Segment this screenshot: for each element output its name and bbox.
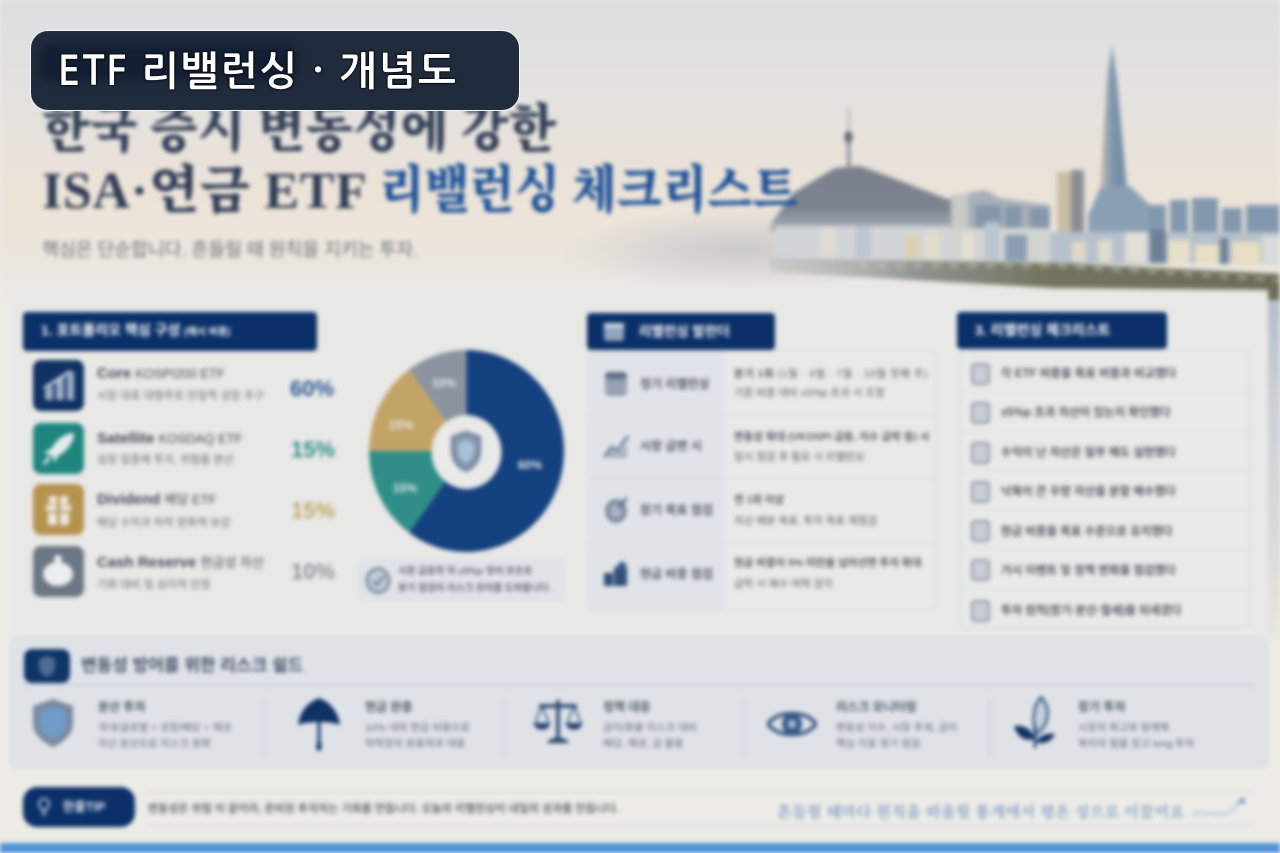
row: satellite [30,420,338,478]
check item 4: 낙폭이 큰 우량 자산을 분할 매수했다 [1001,486,1176,498]
check item 6 [961,549,1249,589]
main white panel [10,293,1268,638]
item: cash buffer: 현금 완충 [365,700,412,714]
check item 3: 수익이 난 자산은 일부 매도 실현했다 [1001,447,1176,459]
check item 7: 투자 원칙(장기·분산·절세)을 되새겼다 [1001,605,1181,617]
dark text underlay [40,44,298,80]
row: market surge: 시장 급변 시 [640,439,702,453]
item: monitoring [764,698,958,750]
icon: building chart [600,558,630,590]
check item 3 [961,432,1249,471]
row: satellite: 성장 업종에 투자, 위험을 분산 [97,454,234,466]
check item 4 [961,471,1249,510]
panel: risk shield [10,637,1268,769]
pie chart: allocation: 15% [389,418,413,432]
item: balance [531,697,698,750]
check item 1: 각 ETF 비중을 목표 비중과 비교했다 [1001,368,1176,380]
icon: trend line [601,434,631,460]
check item 1 [961,354,1249,393]
handwritten note: 흔들릴 때마다 원칙을 떠올릴 통계에서 평온 성으로 이끌어요 [777,805,1185,821]
row: goal check [589,478,937,542]
title: 리밸런싱 체크리스트 [379,163,798,220]
check item 6: 거시 이벤트 및 정책 변화를 점검했다 [1001,565,1176,577]
row: cash check: 현금 비중이 5% 미만을 넘어선면 투자 확대 [734,557,921,569]
item: diversification [30,696,232,750]
icon: calendar [600,320,628,344]
panel: checklist [960,350,1250,628]
row: dividend: Dividend 배당 ETF [97,491,217,508]
heading: section 3 checklist: 3. 리밸런싱 체크리스트 [975,322,1110,338]
panel: portfolio core composition [20,308,338,600]
icon: target [602,495,630,526]
heading: rebalancing timing [587,313,775,350]
heading: section 1: 1. 포트폴리오 핵심 구성 (예시 비중) [41,322,230,338]
item: balance: 배당, 채권, 금 활용 [603,739,684,750]
pie chart: allocation: 60% [518,458,542,472]
icon: piggy bank [33,546,84,597]
icon: lightbulb [35,794,53,818]
row: goal check: 장기 목표 점검 [640,503,713,517]
row: market surge [589,413,937,479]
mountain [770,166,950,232]
bottom accent bar [0,843,1280,853]
title: ISA·연금 ETF [42,163,368,220]
check item 2: ±5%p 초과 자산이 있는지 확인했다 [1001,407,1171,419]
tip text: 변동성은 위험 이 끝이라, 준비된 투자자는 기회를 만듭니다. 오늘의 리밸런싱이 내일의 성과를 만듭니다. [148,803,619,815]
check item 5: 현금 비중을 목표 수준으로 유지했다 [1001,526,1172,538]
item: balance: 금리/환율 리스크 대비 [603,723,697,734]
heading: section 1 [23,312,317,351]
icon: scales [531,697,585,746]
lotte tower [1100,45,1128,235]
row: cash check: 현금 비중 점검 [640,567,713,581]
row: satellite: Satellite KOSDAQ ETF [97,430,242,447]
icon: scribble flourish [1192,796,1248,818]
row: core: 시장 대표 대형주로 안정적 성장 추구 [97,390,264,402]
row: core: Core KOSPI200 ETF [97,365,225,382]
callout: pie note [358,559,566,602]
tip row [20,784,1248,830]
subtitle: 핵심은 단순합니다. 흔들릴 때 원칙을 지키는 투자. [42,239,418,260]
heading: section 3 checklist [957,312,1167,349]
row: regular rebalancing: 기준 비중 대비 ±5%p 초과 시 조정 [734,387,885,399]
item: cash buffer: 하락장의 완충력과 대응 [365,739,465,750]
item: monitoring: 핵심 지표 정기 점검 [836,739,920,750]
badge text: ETF 리밸런싱 · 개념도 [58,50,457,90]
row: cash reserve [30,543,337,600]
row: goal check: 자산 배분 목표, 투자 목표 재점검 [734,515,877,527]
row: cash reserve: 10% [291,559,335,584]
icon: umbrella [295,695,343,754]
icon: check badge [363,564,393,596]
title [40,98,799,220]
title: 한국 증시 변동성에 강한 [42,102,556,159]
item: long-term [1012,694,1196,751]
check item 5 [961,510,1249,549]
row: goal check: 연 1회 이상 [734,494,784,506]
row: dividend: 15% [291,498,335,523]
heading: risk shield [20,646,304,686]
item: long-term: 시장의 회고와 함께해 [1078,723,1169,734]
item: monitoring: 변동성 지수, 시장 추세, 금리 [836,723,957,734]
row: cash check: 급락 시 매수 여력 검각 [734,578,833,590]
pie chart: allocation: 15% [393,481,417,495]
pie chart: allocation: 10% [432,376,456,390]
row: core [30,356,336,414]
icon: calendar [602,369,630,398]
item: monitoring: 리스크 모니터링 [836,700,917,714]
row: satellite: 15% [291,437,335,462]
bridge [770,258,1280,290]
item: long-term: 장기 투자 [1078,700,1126,714]
icon: shield [30,696,76,750]
badge: expert tip: 한줄TIP [63,800,105,814]
hero skyline photo [0,0,1280,304]
check item 7 [968,598,1184,624]
row: cash check [600,554,924,591]
item: cash buffer [295,695,470,754]
left label column [589,351,725,611]
icon: gift box [33,484,84,535]
row: regular rebalancing: 분기 1회 (1월 · 4월 · 7월 · 10월 첫째 주) [734,368,928,380]
item: diversification: 분산 투자 [98,700,146,714]
item: balance: 정책 대응 [603,700,650,714]
icon: rocket [33,423,84,474]
row: dividend: 배당 수익과 하락 완화력 보강 [97,517,231,529]
far buildings [950,190,1050,235]
row: dividend [30,480,338,538]
item: diversification: 국내/글로벌 + 성장/배당 + 채권 [98,723,231,734]
river [600,292,1268,300]
item: long-term: 복리의 힘을 믿고 long 투자 [1078,739,1194,750]
item: diversification: 자산 분산으로 리스크 완화 [98,739,211,750]
near apartment row [775,222,1280,266]
check item 2 [961,393,1249,432]
top-left label badge [30,30,520,110]
heading: risk shield: 변동성 방어를 위한 리스크 쉴드 [81,656,303,675]
heading: rebalancing timing: 리밸런싱 발란더 [639,324,730,339]
tall tan block [1057,172,1071,238]
row: core: 60% [290,376,334,401]
row: cash reserve: 기회 대비 및 심리적 안정 [97,579,210,591]
row: cash reserve: Cash Reserve 현금성 자산 [97,554,264,571]
rule lines [145,790,1255,792]
row: regular rebalancing [589,351,937,414]
row: market surge: 임시 점검 후 필요 시 리밸런싱 [734,451,865,463]
icon: shield badge [20,646,74,686]
row: regular rebalancing: 정기 리밸런싱 [640,377,710,391]
item: cash buffer: 10% 내외 현금 비중으로 [365,723,470,734]
callout: pie note: 시장 급등락 뒤 ±5%p 벗어 보조로 [398,566,532,577]
icon: rising chart [33,360,84,411]
badge: expert tip [23,787,135,827]
pie chart: allocation [366,346,568,556]
icon: sprout [1012,694,1058,751]
icon: eye [764,708,820,740]
row: market surge: 변동성 확대 (VKOSPI 급등, 지수 급락 등) 시 [734,431,930,443]
right edge strip [1268,300,1280,640]
callout: pie note: 분기 점검이 리스크 관리를 도와줍니다. [398,583,551,594]
panel: rebalancing timing [588,350,936,610]
